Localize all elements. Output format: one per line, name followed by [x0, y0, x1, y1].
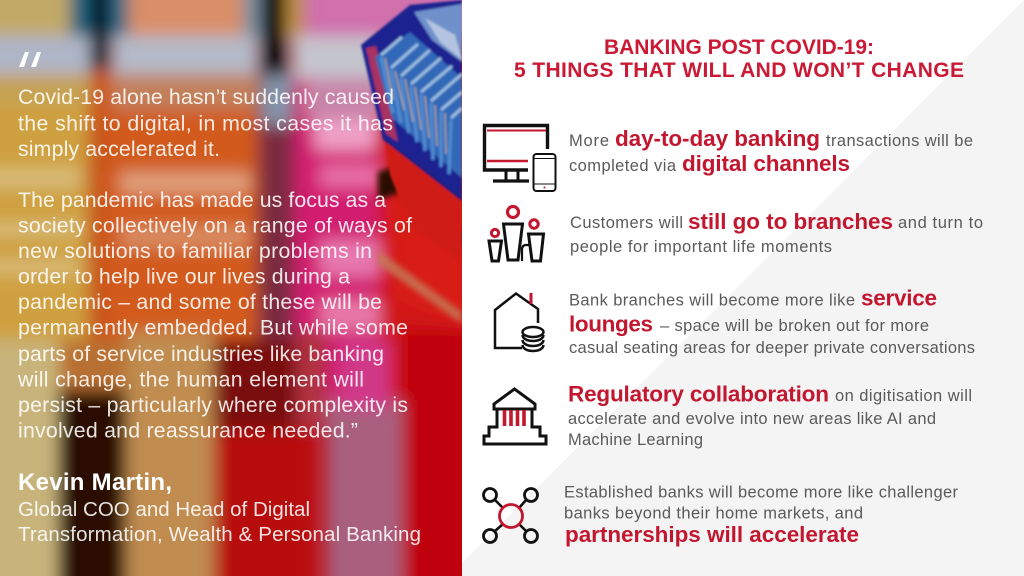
quote text: involved and reassurance needed.” — [18, 418, 358, 442]
quote text: Covid-19 alone hasn’t suddenly caused — [18, 85, 394, 109]
text: branches: still go to branches — [688, 209, 893, 234]
quote text: society collectively on a range of ways of — [18, 214, 412, 238]
quote text: persist – particularly where complexity is — [18, 393, 408, 417]
text: digital channels: More — [569, 132, 609, 150]
text: service lounges: service — [861, 286, 937, 310]
quote text: pandemic – and some of these will be — [18, 290, 382, 314]
text: branches: people for important life moments — [570, 238, 832, 256]
text: regulatory collaboration: Machine Learning — [568, 431, 703, 449]
attribution: Kevin Martin — [18, 469, 421, 546]
text: regulatory collaboration: Regulatory collaboration — [568, 382, 829, 406]
text: service lounges: – space will be broken out for more — [660, 317, 929, 335]
photo: network connector plug — [361, 0, 462, 262]
quote text — [17, 85, 412, 442]
title: 5 THINGS THAT WILL AND WON’T CHANGE — [514, 59, 964, 82]
text: service lounges: lounges — [569, 312, 653, 336]
text: digital channels: digital channels — [682, 151, 850, 176]
text: partnerships — [564, 484, 958, 547]
quote text: order to help live our lives during a — [18, 264, 350, 288]
quote text: parts of service industries like banking — [18, 342, 384, 366]
quote text: will change, the human element will — [17, 368, 364, 392]
text: branches — [570, 209, 983, 256]
quote text: new solutions to familiar problems in — [18, 239, 372, 263]
icon: monitor and phone — [484, 126, 556, 191]
title: BANKING POST COVID-19: — [604, 36, 874, 59]
text: regulatory collaboration — [568, 382, 972, 449]
text: digital channels: day-to-day banking — [615, 126, 820, 151]
quote text: permanently embedded. But while some — [18, 316, 408, 340]
text: partnerships: partnerships will accelerate — [565, 522, 859, 547]
attribution: Kevin Martin: Kevin Martin, — [18, 469, 172, 496]
attribution: Kevin Martin: Transformation, Wealth & Personal Banking — [18, 523, 421, 546]
text: branches: and turn to — [898, 214, 983, 232]
icon: house with coins — [495, 293, 544, 351]
text: service lounges: casual seating areas for deeper private conversations — [569, 339, 975, 357]
text: partnerships: banks beyond their home markets, and — [564, 504, 863, 522]
text: regulatory collaboration: accelerate and evolve into new areas like AI and — [568, 410, 936, 428]
text: partnerships: Established banks will become more like challenger — [564, 484, 958, 502]
quote text: simply accelerated it. — [18, 137, 220, 161]
title — [514, 36, 964, 82]
text: regulatory collaboration: on digitisation will — [835, 387, 972, 405]
text: branches: Customers will — [570, 214, 683, 232]
quote text: the shift to digital, in most cases it has — [18, 112, 393, 136]
icon: network nodes — [484, 488, 538, 542]
text: digital channels: transactions will be — [826, 132, 973, 150]
icon: people — [489, 206, 544, 261]
attribution: Kevin Martin: Global COO and Head of Digital — [18, 498, 310, 521]
text: service lounges: Bank branches will become more like — [569, 292, 855, 310]
text: digital channels — [569, 126, 973, 176]
right panel background — [449, 0, 1024, 576]
icon: bank building — [484, 389, 546, 444]
icon: opening quotation mark — [19, 52, 41, 67]
text: service lounges — [569, 286, 975, 357]
quote text: The pandemic has made us focus as a — [18, 188, 386, 212]
left panel: blurred photo background — [0, 0, 482, 576]
text: digital channels: completed via — [569, 157, 677, 175]
